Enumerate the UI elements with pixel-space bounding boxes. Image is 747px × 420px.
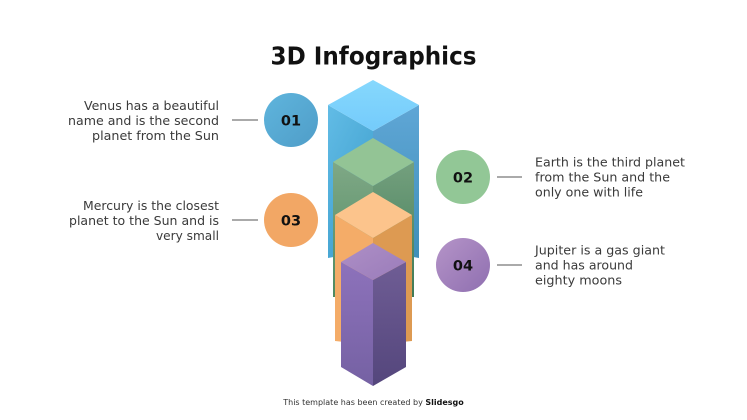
number 03: 03	[281, 214, 301, 230]
text: Venus: name and is the second	[68, 113, 219, 128]
prism: blue	[328, 80, 419, 258]
text: Jupiter: Jupiter is a gas giant	[534, 242, 665, 258]
title: 3D Infographics	[270, 42, 476, 70]
text: Earth: only one with life	[535, 184, 643, 200]
item 04	[436, 238, 665, 292]
item 02	[436, 150, 685, 204]
text: Mercury: very small	[156, 228, 219, 243]
text: Mercury: planet to the Sun and is	[69, 213, 219, 228]
prism: purple	[341, 243, 406, 386]
text: Jupiter: and has around	[535, 258, 633, 272]
text: Venus: Venus has a beautiful	[84, 98, 219, 113]
item 01	[68, 93, 318, 147]
circle 01	[264, 93, 318, 147]
text: Jupiter: eighty moons	[535, 272, 622, 288]
text: Earth: Earth is the third planet	[535, 154, 685, 170]
text: Mercury: Mercury is the closest	[83, 198, 219, 213]
prism: orange	[335, 192, 412, 345]
text: Venus: planet from the Sun	[92, 128, 219, 143]
text: Earth	[535, 154, 685, 200]
text: Earth: from the Sun and the	[535, 170, 670, 184]
circle 02	[436, 150, 490, 204]
text: Mercury	[69, 198, 219, 243]
number 01: 01	[281, 114, 301, 130]
number 02: 02	[453, 170, 473, 186]
prism: green	[333, 138, 414, 297]
footer credit: This template has been created by Slidesgo	[282, 398, 464, 407]
text: Venus	[68, 98, 219, 143]
number 04: 04	[453, 258, 473, 274]
circle 03	[264, 193, 318, 247]
item 03	[69, 193, 318, 247]
circle 04	[436, 238, 490, 292]
text: Jupiter	[534, 242, 665, 288]
